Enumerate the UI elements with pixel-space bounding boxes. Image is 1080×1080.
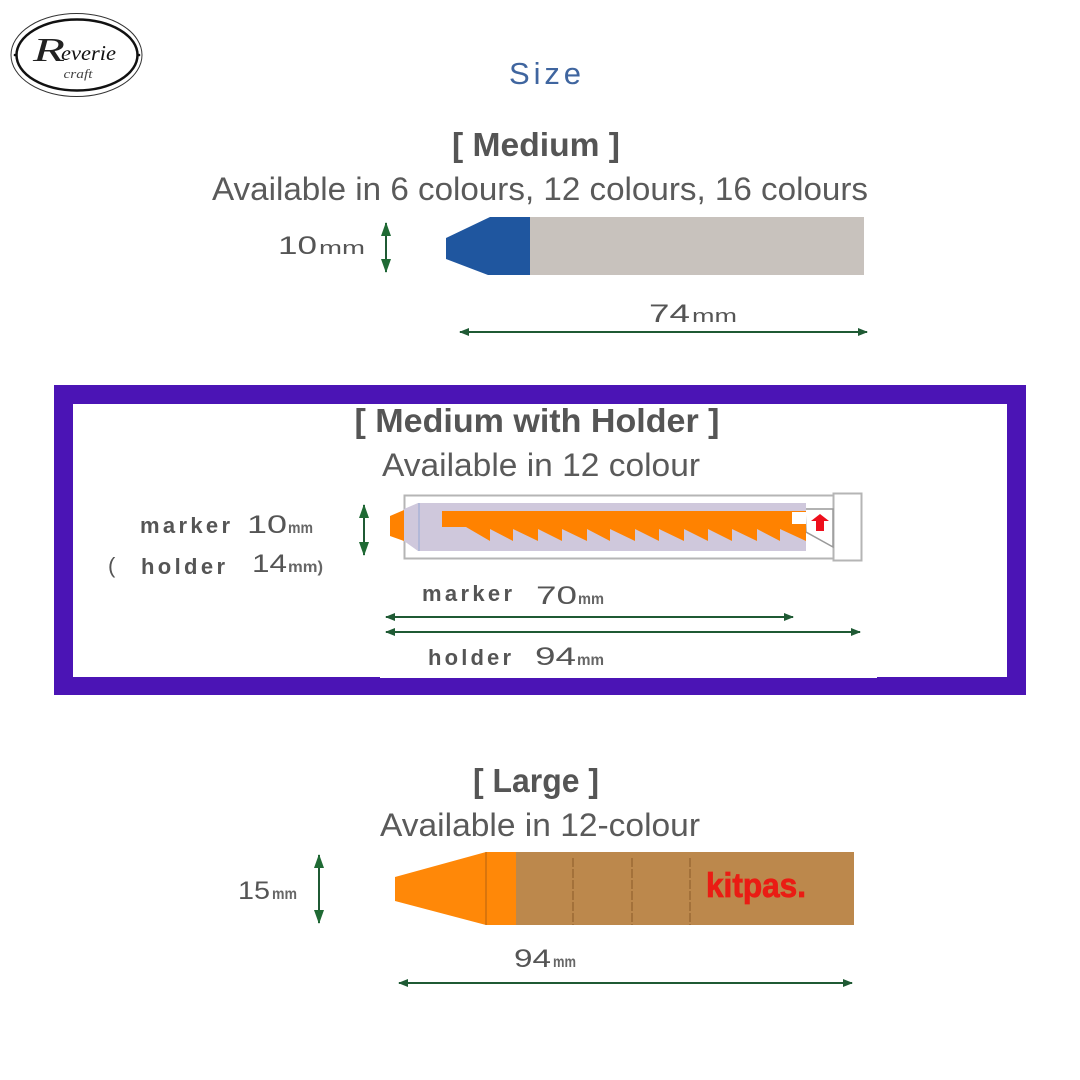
arrow: large height xyxy=(318,855,320,923)
label: holder 14mm: holder xyxy=(141,554,225,579)
label: marker 10mm: marker xyxy=(140,513,230,538)
panel: Medium with Holder xyxy=(54,385,1026,695)
label: marker 70mm: 70 xyxy=(536,582,577,610)
marker: medium xyxy=(446,217,864,275)
label: 74mm: 74 xyxy=(649,300,690,328)
label: holder 14mm: ( xyxy=(108,553,116,578)
label: holder 94mm: holder xyxy=(428,645,511,670)
arrow: holder length xyxy=(386,631,860,633)
heading: Medium: [ Medium ] xyxy=(452,126,620,163)
label: 94mm: 94 xyxy=(514,945,551,973)
label: 10mm xyxy=(278,232,365,260)
label: 10mm: 10 xyxy=(278,232,317,260)
label: holder 14mm: 14 xyxy=(252,550,287,578)
logo: Reverie craft: R xyxy=(31,32,65,69)
arrow: medium height xyxy=(385,223,387,272)
label: holder 94mm: mm xyxy=(577,652,604,669)
marker: large xyxy=(395,852,854,925)
heading: Medium with Holder: [ Medium with Holder ] xyxy=(354,402,720,439)
arrow: marker length xyxy=(386,616,793,618)
notch in frame xyxy=(380,660,877,678)
label: 15mm xyxy=(238,877,297,905)
subheading: holder availability: Available in 12 colour xyxy=(382,447,700,483)
section: Large xyxy=(238,762,854,983)
label: 74mm xyxy=(649,300,737,328)
label: marker 70mm: marker xyxy=(422,581,512,606)
arrow: medium length xyxy=(460,331,867,333)
label: holder 94mm: 94 xyxy=(535,643,576,671)
marker in holder diagram xyxy=(390,494,862,560)
label: marker 70mm xyxy=(422,581,604,610)
label: marker 70mm: mm xyxy=(578,591,604,608)
label: holder 14mm: mm) xyxy=(288,559,323,576)
label: holder 94mm xyxy=(428,643,604,671)
subheading: large availability: Available in 12-colour xyxy=(380,807,700,843)
section: Medium xyxy=(212,126,868,332)
label: marker 10mm xyxy=(140,511,313,539)
label: holder 14mm xyxy=(108,550,323,579)
label: 15mm: mm xyxy=(272,886,297,903)
label: marker 10mm: 10 xyxy=(247,511,287,539)
logo: kitpas: kitpas. xyxy=(706,867,806,905)
arrow: holder height xyxy=(363,505,365,555)
subheading: Medium availability: Available in 6 colours, 12 colours, 16 colours xyxy=(212,171,868,207)
label: 94mm: mm xyxy=(553,954,576,971)
title: Size xyxy=(509,56,581,91)
label: marker 10mm: mm xyxy=(288,520,313,537)
label: 94mm xyxy=(514,945,576,973)
label: 74mm: mm xyxy=(692,306,737,326)
logo: Reverie craft: craft xyxy=(64,66,93,81)
arrow: large length xyxy=(399,982,852,984)
label: 15mm: 15 xyxy=(238,877,270,905)
heading: Large: [ Large ] xyxy=(473,762,599,799)
logo: Reverie craft: everie xyxy=(61,41,116,65)
label: 10mm: mm xyxy=(319,238,365,258)
logo: Reverie craft xyxy=(11,14,142,96)
